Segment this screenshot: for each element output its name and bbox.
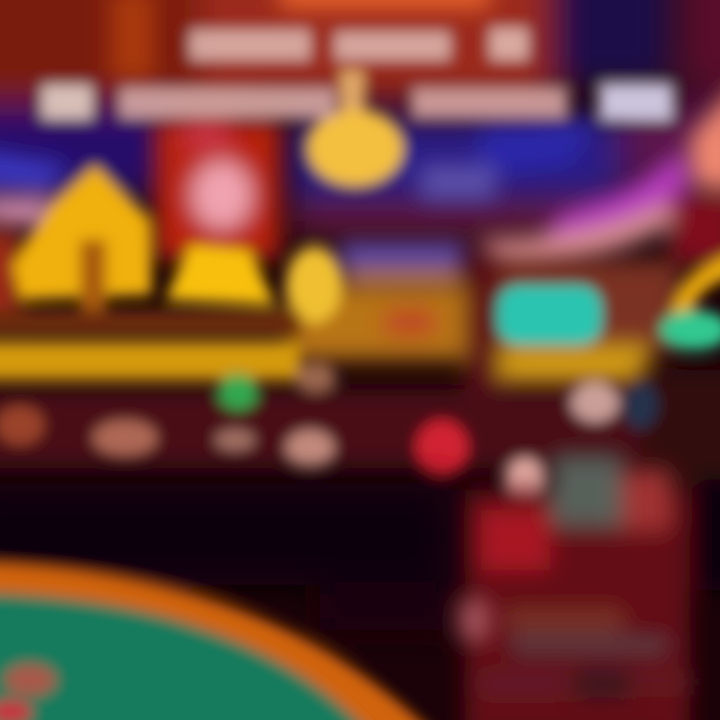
- ceiling: warm and purple zones: [0, 0, 720, 235]
- icon: red column with pink centre: [155, 115, 280, 260]
- ceiling highlights: [0, 0, 720, 286]
- text block: lower-right caption: [460, 600, 690, 698]
- icon: chandelier: [307, 70, 403, 186]
- crowd highlights: [0, 364, 658, 502]
- panel: lower-right red area: [465, 455, 720, 720]
- icon: teal screen: [497, 250, 720, 350]
- bar: balcony rail and lower lights: [0, 310, 300, 380]
- roulette table: [0, 563, 440, 720]
- crowd band: [0, 370, 720, 490]
- dark foreground: [0, 485, 450, 630]
- mid-level venue colours: [0, 230, 680, 405]
- title placeholder: text is illegible in the blurred reference: [42, 28, 672, 120]
- icon: golden building left: [12, 165, 342, 323]
